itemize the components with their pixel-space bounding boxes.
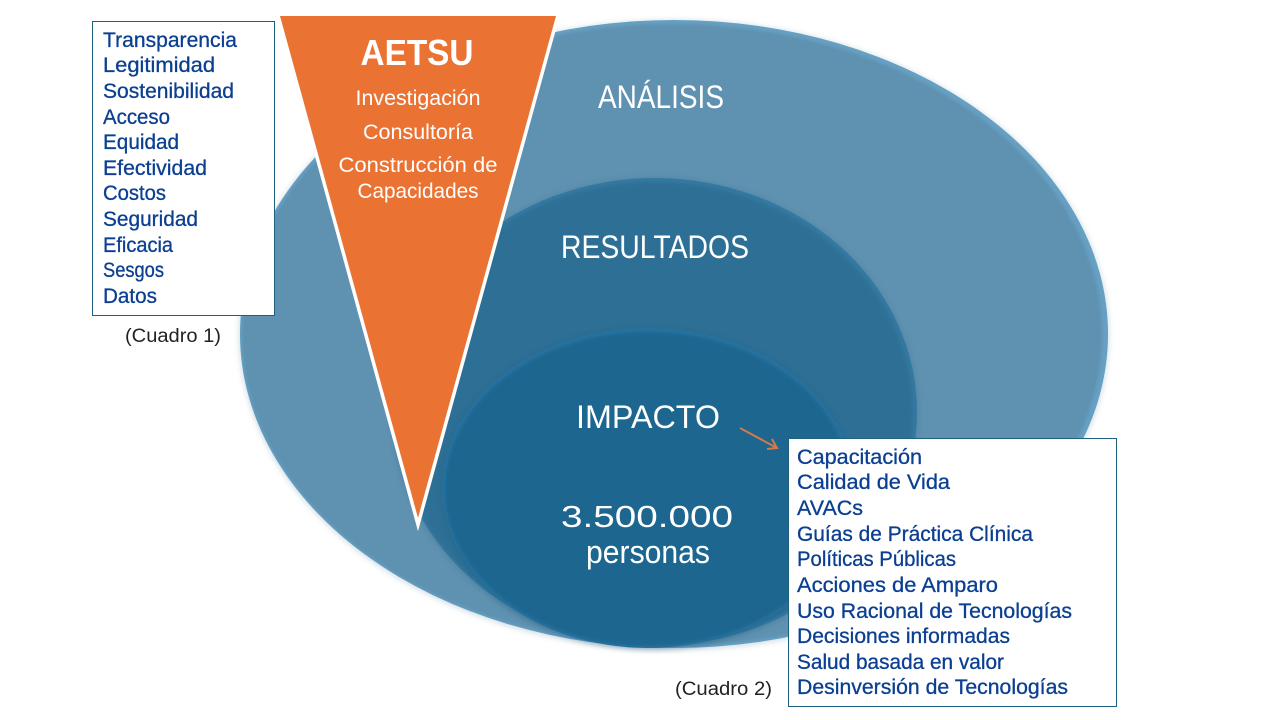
text: services [338,87,498,203]
text: cuadro 1 items: Sostenibilidad [103,80,234,103]
panel: RESULTADOS middle ellipse [392,178,918,648]
figure: 3.500.000 personas: 3.500.000 [561,499,733,534]
text: cuadro 2 items: Políticas Públicas [797,548,956,571]
text: cuadro 2 items: Decisiones informadas [797,625,1010,648]
text: cuadro 1 items [103,29,237,308]
text: cuadro 1 items: Datos [103,285,157,308]
panel: AETSU orange triangle [280,16,556,518]
figure: 3.500.000 personas: personas [586,534,710,570]
text: services: Capacidades [358,180,478,203]
text: cuadro 1 items: Efectividad [103,157,207,180]
text: cuadro 2 items: Uso Racional de Tecnologías [797,600,1072,623]
text: cuadro 1 items: Seguridad [103,208,198,231]
text: cuadro 1 items: Transparencia [103,29,237,52]
text: cuadro 2 items: Guías de Práctica Clínica [797,523,1033,546]
text: cuadro 1 items: Costos [103,182,166,205]
caption: cuadro 2: (Cuadro 2) [675,679,772,700]
text: cuadro 1 items: Equidad [103,131,179,154]
text: cuadro 1 items: Eficacia [103,234,173,257]
text: cuadro 2 items: Acciones de Amparo [797,574,998,597]
text: cuadro 2 items: AVACs [797,497,863,520]
text: services: Consultoría [363,121,473,144]
text: cuadro 1 items: Acceso [103,106,170,129]
text: cuadro 2 items: Desinversión de Tecnologías [797,676,1068,699]
label: ANÁLISIS: ANÁLISIS [598,79,724,115]
text: cuadro 2 items [797,446,1072,699]
heading: AETSU: AETSU [360,32,474,73]
text: cuadro 2 items: Salud basada en valor [797,651,1004,674]
panel: cuadro 1 list [92,22,274,316]
text: services: Construcción de [338,154,498,177]
panel: cuadro 2 list [788,438,1116,706]
text: cuadro 2 items: Capacitación [797,446,922,469]
panel: IMPACTO inner ellipse [441,328,855,650]
figure: 3.500.000 personas [561,499,733,570]
text: services: Investigación [356,87,480,110]
caption: cuadro 1: (Cuadro 1) [125,326,221,347]
label: RESULTADOS: RESULTADOS [561,229,749,265]
text: cuadro 1 items: Legitimidad [103,54,215,77]
label: IMPACTO: IMPACTO [576,399,720,435]
arrow: impacto to cuadro 2 [740,428,777,449]
text: cuadro 2 items: Calidad de Vida [797,471,950,494]
text: cuadro 1 items: Sesgos [103,259,164,282]
